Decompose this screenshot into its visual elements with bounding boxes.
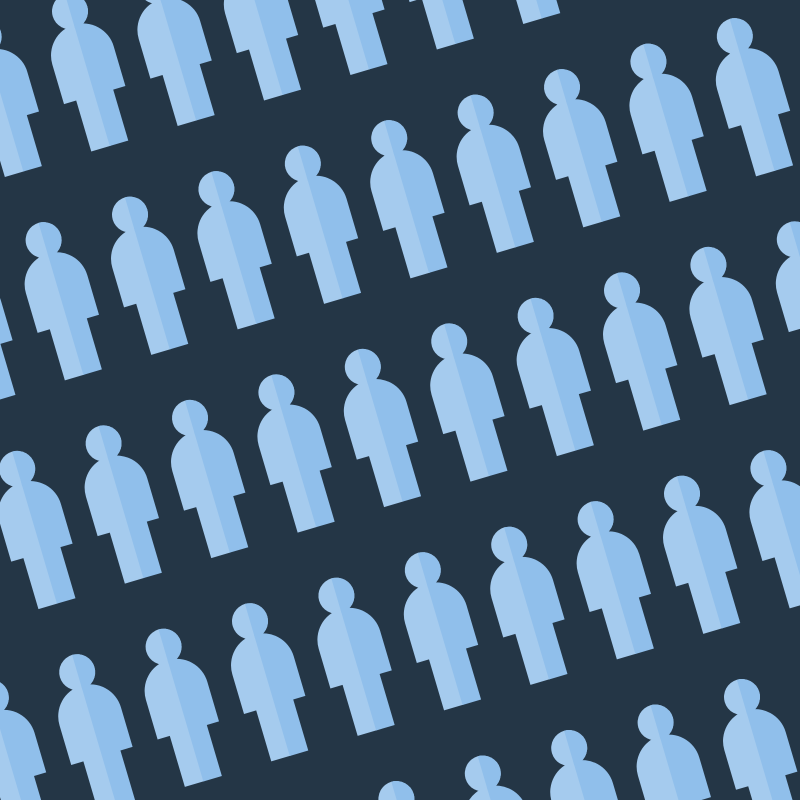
icon: person row 2 figure 3 [94,188,200,358]
icon: person row 4 figure 5 [301,569,407,740]
icon: person row 3 figure 5 [327,341,433,511]
icon: person row 3 figure 2 [68,417,174,587]
icon: person row 4 figure 4 [214,595,320,765]
icon: person row 1 figure 5 [293,0,400,79]
icon: person row 3 figure 7 [500,290,606,460]
icon: person row 1 figure 1 [0,10,54,181]
icon: person row 1 figure 3 [121,0,227,130]
icon: person row 2 figure 9 [613,35,719,205]
icon: person row 3 figure 10 [759,213,800,383]
icon: person row 2 figure 5 [267,137,373,307]
icon: person row 2 figure 8 [526,61,632,231]
icon: person row 2 figure 6 [353,112,460,282]
icon: person row 4 figure 2 [41,646,148,800]
icon: person row 4 figure 3 [128,620,234,791]
icon: person row 3 figure 3 [154,392,260,562]
icon: person row 1 figure 4 [207,0,313,104]
icon: person row 2 figure 2 [8,214,114,384]
icon: person row 3 figure 4 [241,366,347,536]
icon: person row 5 figure 4 [620,696,726,800]
icon: person row 5 figure 3 [533,722,640,800]
icon: person row 5 figure 5 [706,671,800,800]
icon: person row 2 figure 10 [699,10,800,180]
icon: person row 4 figure 1 [0,671,61,800]
icon: person row 4 figure 9 [646,467,752,638]
icon: person row 1 figure 6 [380,0,486,53]
icon: person row 4 figure 8 [560,493,666,663]
icon: person row 3 figure 6 [413,315,520,485]
icon: person row 2 figure 1 [0,239,28,409]
icon: person row 3 figure 8 [586,264,692,434]
icon: person row 4 figure 6 [387,544,493,714]
icon: person row 4 figure 10 [733,442,800,612]
icon: person row 5 figure 1 [361,773,467,800]
icon: person row 3 figure 9 [673,239,779,409]
icon: person row 1 figure 7 [466,0,572,28]
icon: person row 4 figure 7 [473,518,580,689]
icon: person row 5 figure 2 [447,747,553,800]
icon: person row 2 figure 4 [181,163,287,333]
icon: person row 3 figure 1 [0,443,88,613]
icon: person row 1 figure 2 [34,0,140,155]
icon: person row 2 figure 7 [440,86,546,256]
